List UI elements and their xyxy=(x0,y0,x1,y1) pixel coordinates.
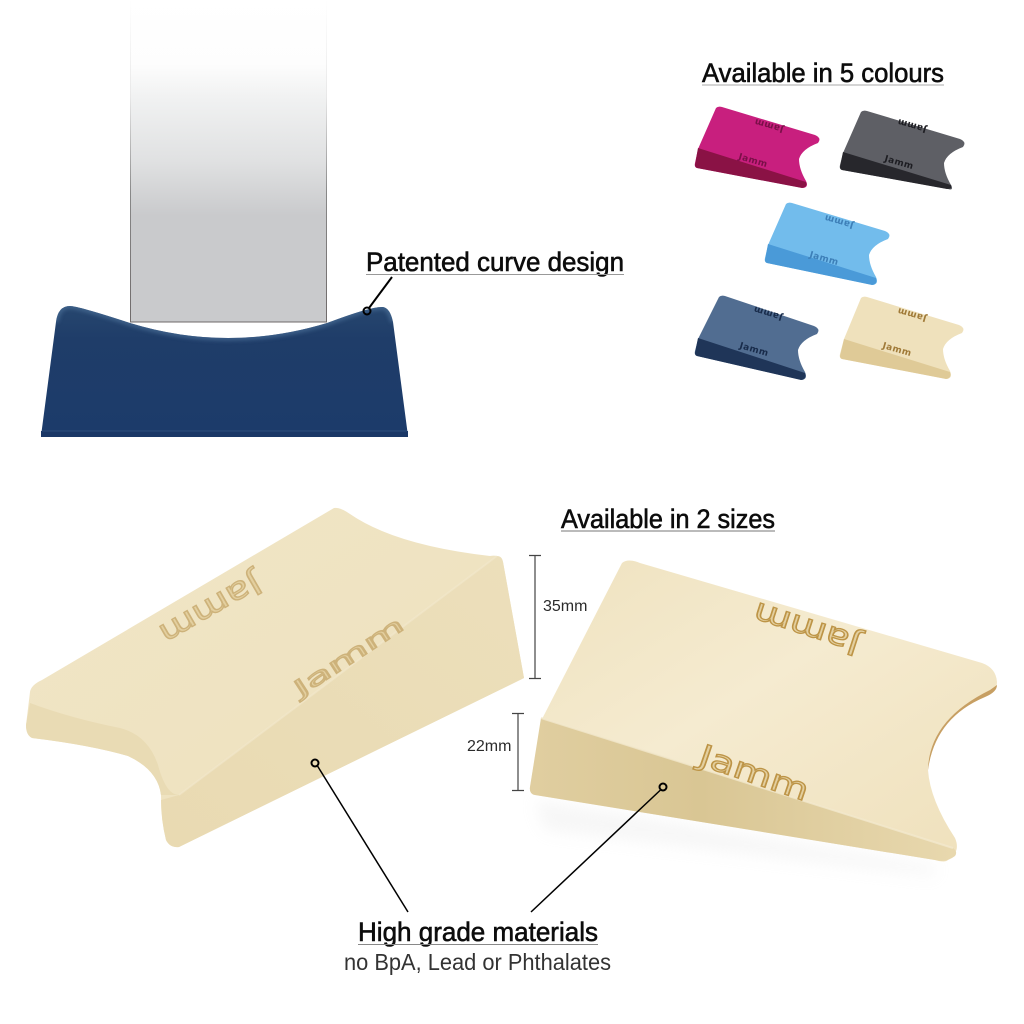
colour swatch: grey wedge: Jamm xyxy=(882,154,915,172)
subheading: material note: no BpA, Lead or Phthalates xyxy=(344,949,611,975)
colour swatch: grey wedge xyxy=(840,111,964,190)
colour swatch: magenta wedge xyxy=(695,107,819,188)
dimension: 35mm: 35mm xyxy=(543,598,587,615)
colour swatch: magenta wedge: Jamm xyxy=(753,116,786,134)
mirror panel xyxy=(130,0,326,322)
colour swatch: slate blue wedge: Jamm xyxy=(752,303,785,322)
large cream wedge, right: Jamm xyxy=(749,594,867,662)
large cream wedge, left xyxy=(26,508,524,847)
soft shadow under right wedge xyxy=(535,800,935,876)
large cream wedge, right: Jamm xyxy=(692,738,814,809)
navy door wedge, front view xyxy=(41,306,408,437)
heading: available in 2 sizes: Available in 2 sizes xyxy=(561,504,775,534)
callout pointer: right wedge material xyxy=(531,784,666,912)
dimension: 35mm xyxy=(529,556,587,678)
dimension: 22mm xyxy=(467,714,524,790)
heading: high grade materials: High grade materials xyxy=(358,917,598,947)
colour swatch: slate blue wedge xyxy=(695,296,818,380)
colour swatch: light blue wedge xyxy=(765,203,889,285)
colour swatch: cream wedge: Jamm xyxy=(880,341,913,359)
heading: patented curve design: Patented curve design xyxy=(366,247,624,277)
colour swatch: magenta wedge: Jamm xyxy=(736,152,769,170)
large cream wedge, left: Jamm xyxy=(286,612,409,704)
large cream wedge, right xyxy=(530,560,997,862)
colour swatch: light blue wedge: Jamm xyxy=(807,250,840,268)
colour swatch: grey wedge: Jamm xyxy=(896,116,929,134)
dimension: 22mm: 22mm xyxy=(467,738,511,755)
colour swatch: light blue wedge: Jamm xyxy=(823,212,856,230)
large cream wedge, left: Jamm xyxy=(153,564,270,651)
colour swatch: cream wedge xyxy=(840,297,963,379)
heading: available in 5 colours: Available in 5 colours xyxy=(702,58,944,88)
callout pointer: left wedge material xyxy=(312,760,408,912)
callout pointer: curve xyxy=(364,277,392,314)
colour swatch: slate blue wedge: Jamm xyxy=(737,341,770,359)
colour swatch: cream wedge: Jamm xyxy=(896,305,929,323)
